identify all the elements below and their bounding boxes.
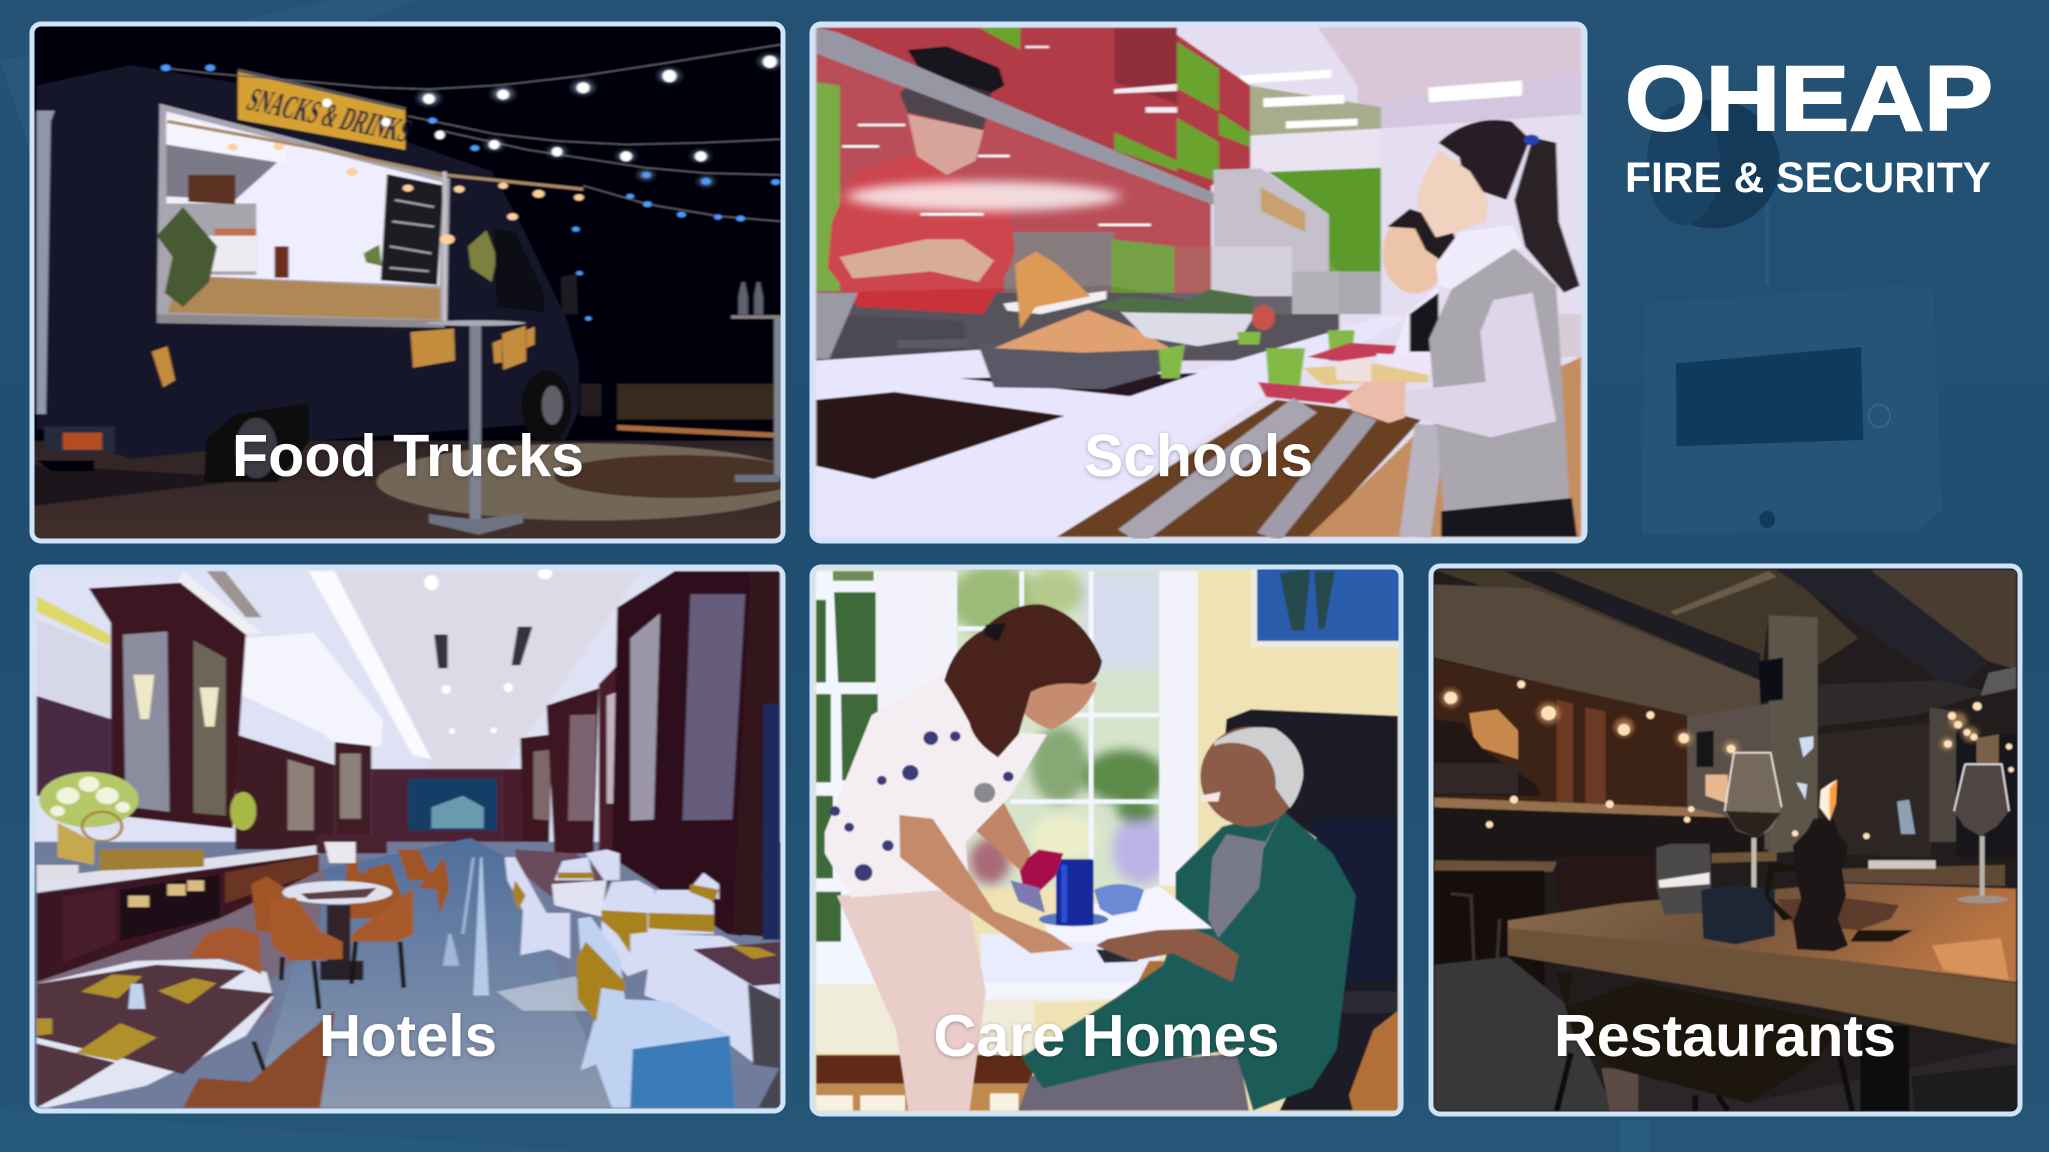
truck rear door	[37, 111, 55, 414]
far dining chairs and cloth tables	[251, 834, 450, 934]
floor	[1434, 957, 1614, 1111]
right columns	[502, 571, 780, 940]
curtain	[1434, 659, 1765, 861]
round table and chairs	[269, 881, 413, 1009]
tray with cup, bowl and flowers	[1010, 850, 1212, 942]
distant table row, right	[515, 850, 612, 917]
ceiling, beams and ducts	[1434, 570, 2016, 727]
boy	[1383, 209, 1458, 361]
marble floor	[251, 838, 617, 1108]
menu sign: snacks and drinks	[238, 70, 417, 150]
label: Schools: Schools	[1084, 423, 1313, 489]
wooden table	[1508, 883, 2016, 1045]
chair	[1556, 855, 2016, 1111]
window garden view	[816, 565, 1169, 984]
gold truck decals	[152, 326, 535, 387]
logo tagline: FIRE & SECURITY	[1625, 154, 1991, 202]
buffet counter	[35, 844, 325, 1022]
frame	[32, 24, 783, 541]
nurse	[825, 604, 1102, 1111]
chair	[1096, 709, 1398, 1111]
ceiling	[37, 568, 641, 800]
green cups and trays	[1159, 330, 1428, 404]
white chairs far right	[505, 850, 780, 1108]
logo wordmark: OHEAP	[1625, 48, 1993, 150]
floral display	[37, 772, 256, 878]
right buffet table	[693, 942, 780, 1108]
under counter wood and floor	[1057, 314, 1581, 537]
marble cup	[1701, 863, 1795, 944]
photo: hotel dining room	[26, 562, 795, 1118]
ceiling and back wall	[1239, 27, 1582, 272]
warm hanging lights and bokeh	[1441, 681, 2014, 839]
chef	[816, 46, 1015, 359]
truck wheels	[37, 371, 572, 482]
photo: school canteen serving line	[806, 18, 1590, 546]
ground and circular paving	[26, 384, 805, 544]
frame	[812, 567, 1401, 1114]
panel: care homes	[806, 562, 1410, 1118]
front table with placemats and napkins	[37, 926, 335, 1108]
label: Hotels: Hotels	[319, 1003, 497, 1069]
sneeze guard glass	[816, 27, 1338, 314]
serving window	[157, 104, 450, 328]
panel: restaurants	[1422, 562, 2029, 1118]
water glass	[1657, 844, 1712, 915]
awning rail	[167, 121, 583, 189]
plate and small bowl	[1777, 898, 1899, 930]
logo: OHEAP Fire and Security	[1625, 48, 1993, 202]
girl	[1344, 120, 1580, 537]
label: Food Trucks: Food Trucks	[232, 423, 584, 489]
gold chair sashes	[513, 873, 719, 1022]
panel: food trucks	[26, 18, 805, 546]
chandelier	[235, 633, 383, 750]
back wall and column	[1687, 615, 2016, 857]
background tables	[1434, 800, 2005, 1011]
cab window and mirror	[494, 228, 578, 314]
photo: candle-lit restaurant table	[1422, 562, 2029, 1118]
truck body	[37, 65, 579, 459]
string lights	[161, 45, 780, 321]
frame	[1431, 566, 2020, 1114]
panel: schools	[806, 18, 1590, 546]
left pillar	[89, 571, 262, 828]
elderly man	[1018, 727, 1356, 1111]
food: pan, plate, salad bowl	[897, 252, 1275, 389]
silver rails	[1130, 405, 1431, 537]
hanging plants	[157, 207, 497, 307]
icon: faded fire alarm control panel	[1642, 286, 1942, 534]
far room and end wall	[235, 734, 502, 850]
wine glass, right	[1954, 764, 2009, 903]
white window frames	[878, 571, 1198, 886]
panel: hotels	[26, 562, 795, 1118]
counter and hob	[816, 314, 1407, 537]
red and green wall	[816, 27, 1381, 361]
frame	[32, 567, 783, 1111]
pepper mill candle and flame	[1793, 780, 1848, 951]
frame	[812, 24, 1585, 541]
window sill and lower wall	[816, 934, 1159, 1111]
label: Restaurants: Restaurants	[1554, 1003, 1896, 1069]
painting on wall	[1251, 565, 1402, 647]
menu sign: snacks and drinks: SNACKS & DRINKS	[241, 82, 417, 150]
wine glass, left	[1725, 753, 1782, 888]
photo: nurse serving tray to elderly man	[806, 562, 1410, 1118]
icon: faded alarm sounder	[1647, 100, 1780, 286]
photo: food truck at night	[26, 18, 805, 546]
label: Care Homes: Care Homes	[934, 1003, 1280, 1069]
high tables and bottles	[426, 282, 781, 535]
